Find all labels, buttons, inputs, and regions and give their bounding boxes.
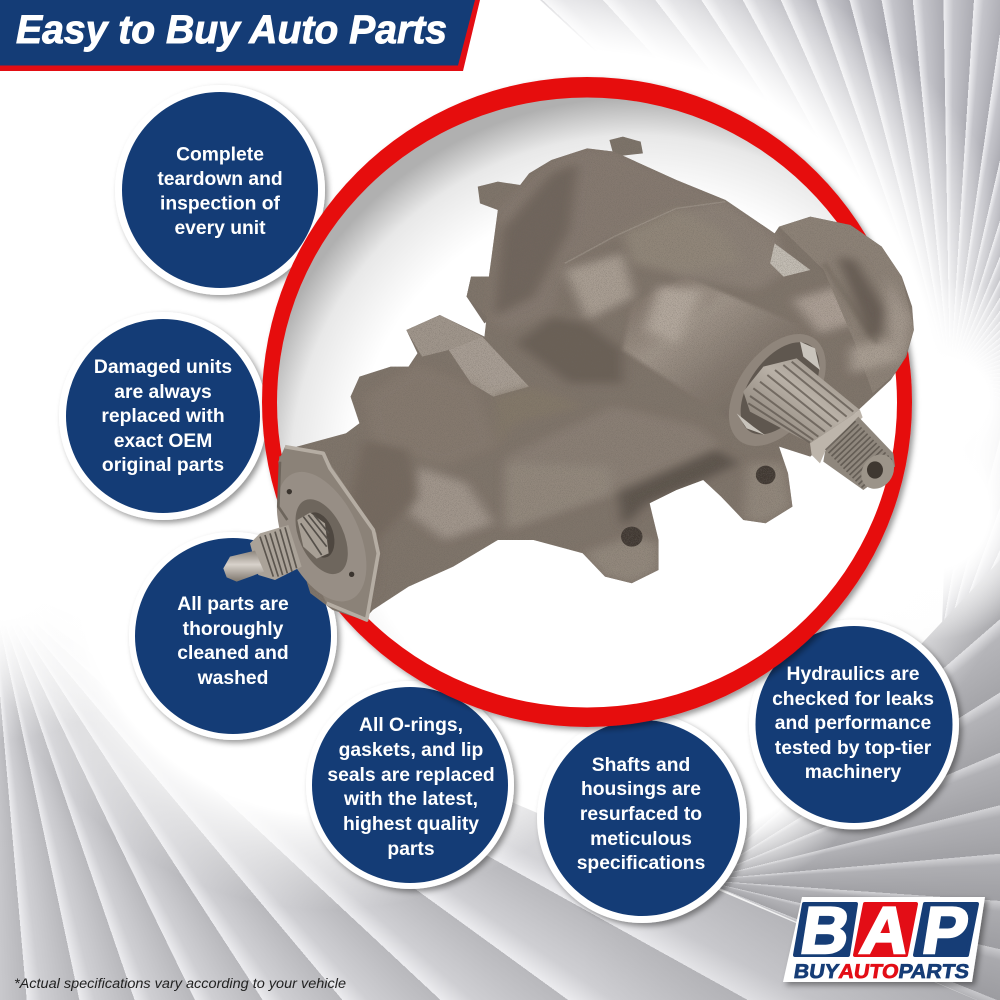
gear housing body bbox=[279, 137, 914, 620]
callout: hydraulics: and performance bbox=[775, 713, 931, 734]
BAP logo bbox=[783, 894, 985, 983]
callout: o-rings: with the latest, bbox=[343, 789, 478, 810]
callout: cleaned: cleaned and bbox=[177, 643, 289, 664]
callout: teardown bbox=[115, 85, 325, 295]
callout: damaged units: exact OEM bbox=[114, 431, 212, 452]
callout: o-rings bbox=[306, 681, 514, 889]
BAP logo: P bbox=[918, 894, 973, 968]
callout: teardown: every unit bbox=[174, 218, 266, 239]
callout: shafts bbox=[537, 713, 747, 923]
callout: cleaned: All parts are bbox=[177, 594, 289, 615]
callout: o-rings: parts bbox=[387, 839, 435, 860]
callout: damaged units bbox=[59, 312, 267, 520]
callout: damaged units: replaced with bbox=[101, 406, 225, 427]
callout: teardown: Complete bbox=[176, 144, 264, 166]
callout: damaged units: are always bbox=[114, 382, 212, 403]
callout: shafts: Shafts and bbox=[592, 755, 690, 776]
callout: o-rings: All O-rings, bbox=[359, 715, 463, 736]
callout: cleaned: washed bbox=[197, 668, 268, 689]
callout: hydraulics: Hydraulics are bbox=[787, 664, 920, 685]
callout: shafts: meticulous bbox=[590, 829, 692, 850]
steering gear box photo illustration bbox=[223, 137, 914, 620]
left pinion end bbox=[223, 447, 385, 620]
title text: Easy to Buy Auto Parts bbox=[16, 8, 447, 52]
callout: cleaned bbox=[129, 532, 337, 740]
callout: shafts: specifications bbox=[577, 853, 705, 874]
callout: o-rings: seals are replaced bbox=[327, 765, 495, 786]
BAP logo: BUYAUTOPARTS bbox=[792, 961, 971, 983]
title banner bbox=[0, 0, 480, 71]
callout: damaged units: Damaged units bbox=[94, 357, 232, 378]
callout: damaged units: original parts bbox=[102, 455, 224, 476]
callout: teardown: inspection of bbox=[160, 194, 281, 214]
callout: shafts: resurfaced to bbox=[580, 804, 702, 825]
callout: teardown: teardown and bbox=[157, 169, 283, 190]
callout: hydraulics: checked for leaks bbox=[772, 689, 934, 710]
callout: hydraulics bbox=[749, 620, 959, 830]
BAP logo: A bbox=[856, 894, 915, 968]
callout: o-rings: highest quality bbox=[343, 814, 479, 835]
footnote: *Actual specifications vary according to your vehicle bbox=[14, 976, 346, 992]
callout: hydraulics: tested by top-tier bbox=[775, 738, 932, 759]
callout: cleaned: thoroughly bbox=[183, 619, 284, 640]
BAP logo: B bbox=[796, 894, 855, 968]
callout: o-rings: gaskets, and lip bbox=[339, 740, 483, 761]
callout: hydraulics: machinery bbox=[805, 762, 901, 783]
callout: shafts: housings are bbox=[581, 779, 701, 800]
output shaft bbox=[709, 316, 901, 495]
red ring with photo backdrop bbox=[262, 77, 912, 727]
